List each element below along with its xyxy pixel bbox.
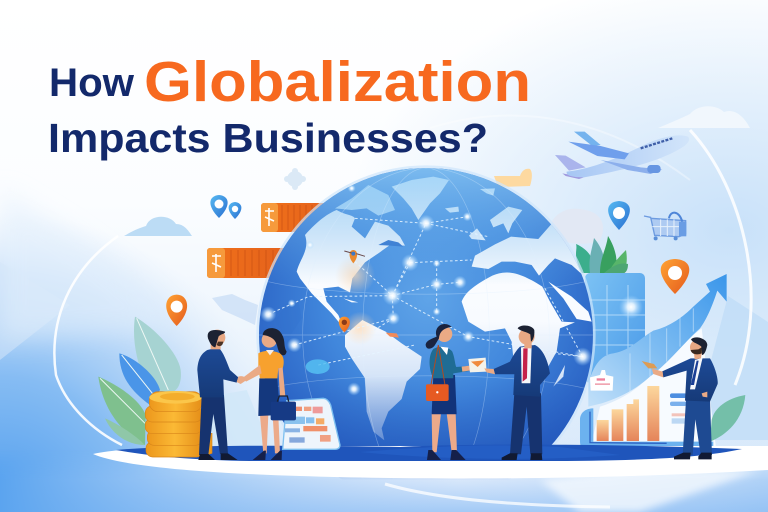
faded mountain [210, 390, 270, 447]
person: woman left [243, 328, 287, 460]
person: man center [484, 325, 550, 460]
left scene people [145, 328, 340, 460]
halo ring [54, 116, 751, 445]
globe [256, 165, 596, 505]
icon: pin on globe [339, 317, 350, 332]
faded container behind globe [494, 169, 532, 187]
note card [590, 370, 613, 391]
person: woman right [426, 324, 471, 460]
panel: document left [283, 398, 340, 449]
title: How [49, 61, 135, 105]
icon: orange pin right [661, 259, 689, 294]
pills [670, 393, 687, 398]
continents [297, 177, 592, 440]
orange island [386, 333, 399, 338]
glow nodes [260, 184, 592, 396]
shipping containers [207, 203, 331, 278]
leaves left [98, 317, 181, 445]
airplane [555, 132, 689, 179]
icon: growth arrow [588, 274, 727, 407]
right scene: chart backing [580, 274, 727, 453]
panel border [580, 408, 713, 451]
center people [426, 324, 550, 460]
icon: shopping cart [644, 213, 686, 240]
globe card glow [306, 359, 330, 374]
icon: orange pin left [166, 295, 187, 326]
icon: coin stack [145, 391, 212, 457]
bar chart [597, 420, 609, 441]
icon: envelope between people [468, 358, 487, 372]
icon: blue location pins left [210, 195, 241, 219]
title [48, 50, 531, 161]
floor [0, 445, 768, 512]
white backing [590, 328, 717, 453]
leaf right [710, 395, 745, 442]
person: man left [197, 330, 247, 460]
title: Impacts Businesses? [48, 115, 488, 161]
faded map left [212, 294, 258, 325]
route lines [268, 217, 583, 365]
icon: briefcase [271, 396, 296, 420]
plant and blue card [576, 236, 645, 383]
icon: pin north globe [344, 250, 365, 263]
clouds [124, 106, 750, 236]
icon: red handbag [426, 384, 449, 401]
faded gear [284, 168, 306, 190]
title: Globalization [144, 50, 531, 114]
left scene [98, 295, 270, 447]
faded cloud right of globe [550, 209, 603, 244]
person: man right [642, 337, 718, 459]
icon: blue pin right [608, 201, 630, 230]
right scene people [642, 337, 745, 459]
